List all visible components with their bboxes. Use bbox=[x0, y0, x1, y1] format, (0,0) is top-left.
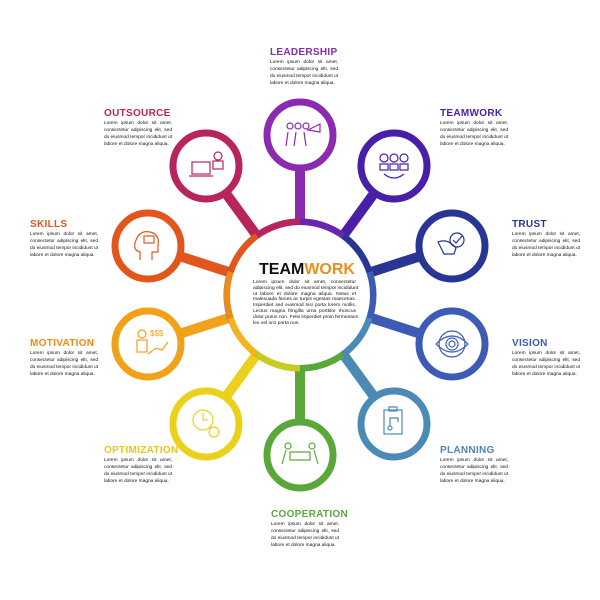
label: outsource: Lorem ipsum dolor sit amet, bbox=[104, 121, 172, 126]
label: optimization: Lorem ipsum dolor sit amet, bbox=[104, 458, 172, 463]
label: teamwork bbox=[440, 108, 508, 147]
label: teamwork: do eiusmod tempor incididunt ut bbox=[440, 135, 508, 140]
hub text: malesuada fames ac turpis egestas maecenas. bbox=[253, 297, 356, 302]
label: cooperation: labore et dolore magna aliqua. bbox=[271, 543, 336, 548]
label: skills: do eiusmod tempor incididunt ut bbox=[30, 246, 98, 251]
label: trust: TRUST bbox=[512, 219, 547, 230]
hub text: Lorem ipsum dolor sit amet, consectetur bbox=[253, 280, 356, 285]
hub text: ut labore et dolore magna aliqua. Netus et bbox=[253, 292, 356, 297]
label: teamwork: labore et dolore magna aliqua. bbox=[440, 142, 505, 147]
label: leadership: LEADERSHIP bbox=[270, 47, 337, 58]
label: motivation: labore et dolore magna aliqua. bbox=[30, 372, 95, 377]
label: motivation: do eiusmod tempor incididunt ut bbox=[30, 365, 98, 370]
label: outsource: labore et dolore magna aliqua. bbox=[104, 142, 169, 147]
label: vision: Lorem ipsum dolor sit amet, bbox=[512, 351, 580, 356]
label: cooperation: COOPERATION bbox=[271, 509, 348, 520]
label: motivation: MOTIVATION bbox=[30, 338, 94, 349]
label: outsource bbox=[104, 108, 172, 147]
icons bbox=[135, 123, 468, 464]
label: teamwork: Lorem ipsum dolor sit amet, bbox=[440, 121, 508, 126]
label: planning: Lorem ipsum dolor sit amet, bbox=[440, 458, 508, 463]
hub text: leo vel orci porta non. bbox=[253, 321, 300, 326]
hub text bbox=[253, 280, 358, 326]
label: leadership bbox=[270, 47, 338, 86]
hub text: dolor purus non. Felis imperdiet proin fermentum bbox=[253, 315, 358, 320]
label: leadership: labore et dolore magna aliqua. bbox=[270, 81, 335, 86]
label: optimization: labore et dolore magna aliqua. bbox=[104, 479, 169, 484]
label: motivation: Lorem ipsum dolor sit amet, bbox=[30, 351, 98, 356]
label: optimization: OPTIMIZATION bbox=[104, 445, 179, 456]
icons: $$$ bbox=[150, 329, 164, 338]
label: leadership: Lorem ipsum dolor sit amet, bbox=[270, 60, 338, 65]
label: planning: consectetur adipiscing elit, sed bbox=[440, 465, 508, 470]
label: skills: labore et dolore magna aliqua. bbox=[30, 253, 95, 258]
hub title: TEAMWORK bbox=[259, 261, 355, 278]
label: trust: consectetur adipiscing elit, sed bbox=[512, 239, 580, 244]
label: vision: VISION bbox=[512, 338, 548, 349]
label: planning bbox=[440, 445, 508, 484]
label: planning: do eiusmod tempor incididunt ut bbox=[440, 472, 508, 477]
label: optimization bbox=[104, 445, 179, 484]
label: motivation: consectetur adipiscing elit, sed bbox=[30, 358, 98, 363]
hub text: Imperdiet sed euismod nisi porta lorem mollis. bbox=[253, 303, 356, 308]
label: optimization: do eiusmod tempor incididunt ut bbox=[104, 472, 172, 477]
label: cooperation bbox=[271, 509, 348, 548]
label: trust: do eiusmod tempor incididunt ut bbox=[512, 246, 580, 251]
label: skills: Lorem ipsum dolor sit amet, bbox=[30, 232, 98, 237]
label: cooperation: consectetur adipiscing elit, sed bbox=[271, 529, 339, 534]
label: planning: PLANNING bbox=[440, 445, 495, 456]
stems bbox=[148, 135, 452, 455]
node circles bbox=[115, 102, 485, 488]
label: vision: labore et dolore magna aliqua. bbox=[512, 372, 577, 377]
label: skills: consectetur adipiscing elit, sed bbox=[30, 239, 98, 244]
label: vision: do eiusmod tempor incididunt ut bbox=[512, 365, 580, 370]
label: leadership: consectetur adipiscing elit, sed bbox=[270, 67, 338, 72]
label: leadership: do eiusmod tempor incididunt ut bbox=[270, 74, 338, 79]
label: outsource: do eiusmod tempor incididunt ut bbox=[104, 135, 172, 140]
label: trust bbox=[512, 219, 580, 258]
label: skills: SKILLS bbox=[30, 219, 67, 230]
label: motivation bbox=[30, 338, 98, 377]
label: trust: labore et dolore magna aliqua. bbox=[512, 253, 577, 258]
label: cooperation: do eiusmod tempor incididunt ut bbox=[271, 536, 339, 541]
label: teamwork: TEAMWORK bbox=[440, 108, 502, 119]
label: vision: consectetur adipiscing elit, sed bbox=[512, 358, 580, 363]
hub ring bbox=[227, 222, 373, 368]
label: planning: labore et dolore magna aliqua. bbox=[440, 479, 505, 484]
hub text: adipiscing elit, sed do eiusmod tempor incididunt bbox=[253, 286, 358, 291]
label: outsource: consectetur adipiscing elit, sed bbox=[104, 128, 172, 133]
label: teamwork: consectetur adipiscing elit, sed bbox=[440, 128, 508, 133]
label: vision bbox=[512, 338, 580, 377]
label: skills bbox=[30, 219, 98, 258]
label: trust: Lorem ipsum dolor sit amet, bbox=[512, 232, 580, 237]
label: outsource: OUTSOURCE bbox=[104, 108, 171, 119]
hub text: Lectus magna fringilla urna porttitor rhoncus bbox=[253, 309, 356, 314]
label: cooperation: Lorem ipsum dolor sit amet, bbox=[271, 522, 339, 527]
label: optimization: consectetur adipiscing elit, sed bbox=[104, 465, 172, 470]
